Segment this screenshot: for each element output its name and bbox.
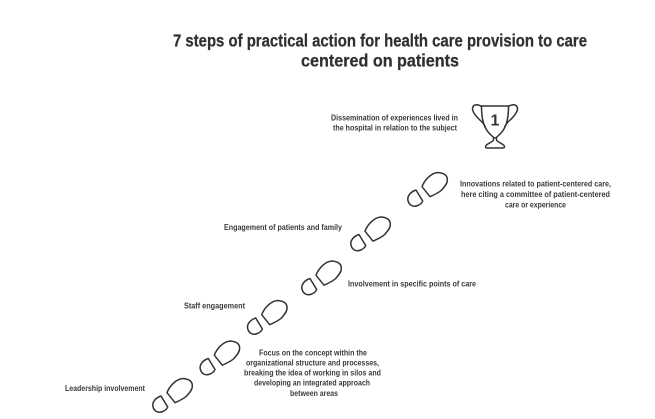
- title: centered on patients: [301, 50, 459, 70]
- title: [173, 30, 587, 70]
- title: 7 steps of practical action for health care provision to care: [173, 30, 587, 50]
- icon: footprint 2: [200, 341, 240, 375]
- text: dissemination: [331, 113, 458, 133]
- number one on trophy: 1: [491, 112, 500, 130]
- text: involvement: Involvement in specific points of care: [348, 278, 476, 288]
- text: focus on concept: developing an integrated approach: [254, 377, 370, 387]
- text: dissemination: the hospital in relation to the subject: [333, 123, 457, 133]
- text: innovations: [460, 178, 611, 209]
- text: innovations: care or experience: [505, 199, 566, 209]
- text: staff engagement: Staff engagement: [184, 301, 245, 311]
- icon: footprint 1: [153, 378, 192, 412]
- text: dissemination: Dissemination of experiences lived in: [331, 113, 458, 123]
- text: leadership: Leadership involvement: [65, 383, 145, 393]
- text: focus on concept: [244, 347, 381, 398]
- text: focus on concept: breaking the idea of working in silos and: [244, 367, 381, 377]
- icon: footprint 5: [351, 217, 390, 251]
- text: innovations: Innovations related to patient-centered care,: [460, 178, 611, 188]
- icon: footprint 6: [408, 172, 447, 206]
- text: engagement of patients: Engagement of patients and family: [224, 222, 342, 232]
- icon: footprint 4: [302, 261, 341, 295]
- text: focus on concept: organizational structure and processes,: [246, 357, 379, 367]
- icon: trophy: [472, 105, 518, 148]
- icon: footprint 3: [248, 300, 287, 334]
- text: focus on concept: Focus on the concept within the: [259, 347, 367, 357]
- text: focus on concept: between areas: [290, 388, 338, 398]
- text: innovations: here citing a committee of patient-centered: [461, 189, 610, 199]
